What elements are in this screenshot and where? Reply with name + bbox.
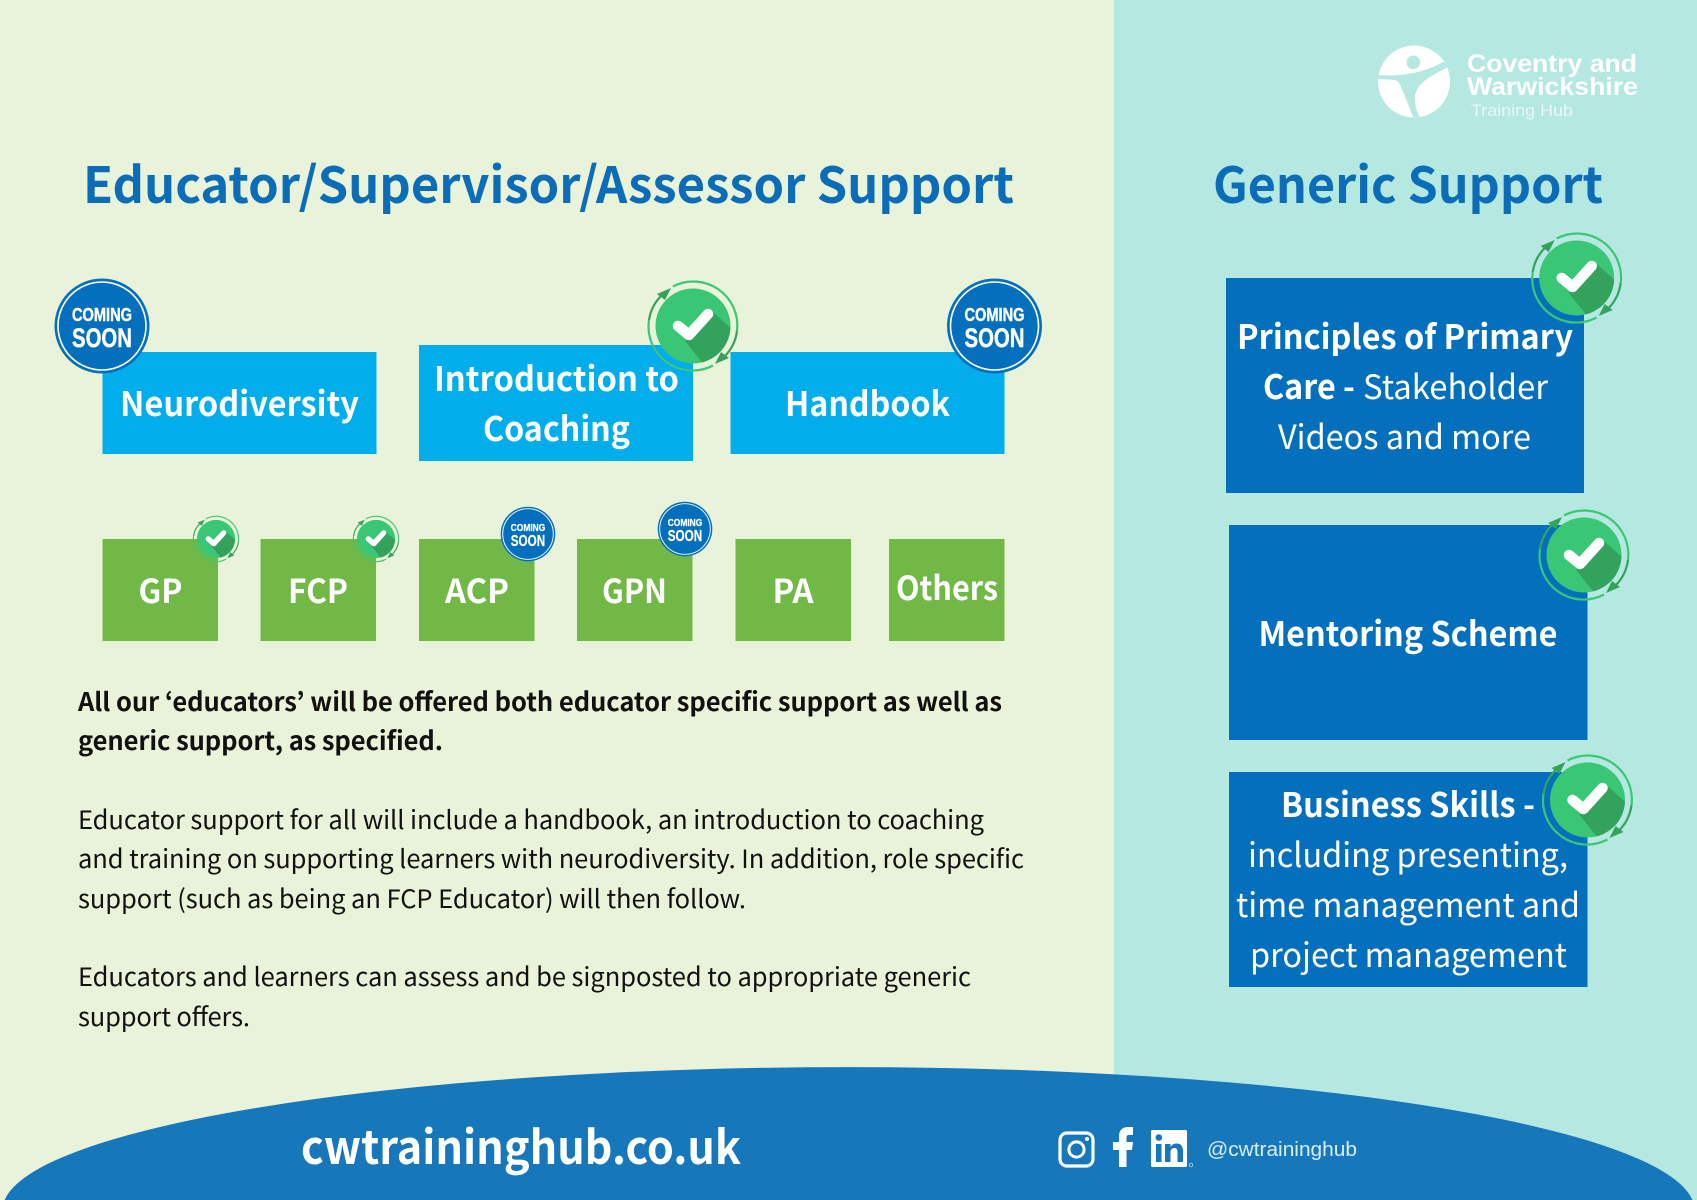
panel: Neurodiversity: Neurodiversity: [120, 377, 359, 426]
footer website: cwtraininghub.co.uk: [301, 1112, 741, 1178]
role box: GPN: GPN: [602, 565, 667, 613]
panel: Principles of Primary Care: Care -: [1263, 360, 1355, 409]
panel: Business Skills: time management and: [1236, 878, 1580, 927]
badge: coming soon Neurodiversity: [54, 278, 150, 374]
badge: tick Introduction to Coaching: [649, 282, 737, 371]
badge: coming soon ACP: [501, 507, 555, 561]
badge: tick GP: [193, 516, 239, 562]
panel: Business Skills: project management: [1250, 928, 1567, 977]
panel: Mentoring Scheme: Mentoring Scheme: [1258, 607, 1558, 656]
role box: Others: [889, 539, 1004, 641]
badge: coming soon Handbook: COMING: [964, 305, 1024, 325]
role box: Others: Others: [896, 562, 998, 610]
icon: facebook: [1113, 1127, 1133, 1167]
text block: educator support description: Educator support for all will include a handbook, an introduction to coaching: [78, 800, 985, 837]
role box: ACP: ACP: [444, 565, 509, 613]
panel: Introduction to Coaching: [419, 345, 693, 461]
badge: coming soon ACP: COMING: [511, 523, 545, 534]
panel: Business Skills: [1229, 772, 1588, 987]
badge: tick Mentoring Scheme: [1540, 511, 1628, 600]
panel: Principles of Primary Care: Videos and more: [1278, 410, 1531, 459]
badge: coming soon Handbook: [947, 278, 1042, 374]
badge: coming soon Neurodiversity: SOON: [72, 323, 132, 353]
icon: linkedin: [1151, 1130, 1193, 1167]
heading: Generic Support: Generic Support: [1213, 146, 1603, 218]
role box: FCP: [260, 539, 376, 641]
logo: Coventry and Warwickshire Training Hub: Training Hub: [1471, 101, 1573, 120]
role box: PA: PA: [772, 565, 814, 613]
text block: educator support description: support (such as being an FCP Educator) will then follow.: [78, 879, 746, 916]
badge: coming soon ACP: SOON: [511, 533, 545, 550]
text block: signposting note: [78, 957, 971, 1034]
badge: coming soon Handbook: SOON: [964, 323, 1024, 353]
panel: Introduction to Coaching: Coaching: [483, 402, 630, 451]
logo: Coventry and Warwickshire Training Hub: [1378, 46, 1638, 120]
panel: Business Skills: Business Skills -: [1281, 778, 1535, 827]
badge: tick FCP: [353, 516, 399, 562]
role box: PA: [736, 539, 851, 641]
panel: Principles of Primary Care: Stakeholder: [1363, 360, 1549, 409]
footer handle: @cwtraininghub: [1207, 1139, 1357, 1161]
icon: instagram: [1060, 1133, 1093, 1166]
footer band: [5, 1067, 1692, 1200]
role box: ACP: [419, 539, 534, 641]
text block: bold statement: generic support, as specified.: [78, 721, 443, 758]
text block: bold statement: [77, 682, 1002, 758]
badge: coming soon Neurodiversity: COMING: [72, 305, 132, 325]
panel: Business Skills: including presenting,: [1248, 828, 1568, 877]
logo: Coventry and Warwickshire Training Hub: Coventry and: [1467, 50, 1637, 78]
panel: Introduction to Coaching: Introduction to: [434, 352, 679, 401]
heading: Educator/Supervisor/Assessor Support: Educator/Supervisor/Assessor Support: [83, 146, 1014, 218]
panel: Handbook: Handbook: [785, 377, 951, 426]
role box: GP: GP: [138, 565, 182, 613]
badge: coming soon GPN: SOON: [668, 528, 702, 545]
panel: Mentoring Scheme: [1229, 525, 1588, 740]
panel: Principles of Primary Care: Principles of Primary: [1237, 310, 1573, 359]
badge: coming soon GPN: COMING: [668, 518, 702, 529]
panel: left background: [0, 0, 1114, 1200]
logo: Coventry and Warwickshire Training Hub: Warwickshire: [1467, 73, 1638, 101]
text block: educator support description: and training on supporting learners with neurodiversity. In addition, role specific: [78, 839, 1024, 876]
text block: signposting note: support offers.: [78, 997, 250, 1034]
text block: educator support description: [78, 800, 1024, 916]
badge: tick Principles of Primary Care: [1532, 234, 1621, 323]
badge: coming soon GPN: [658, 502, 712, 556]
text block: bold statement: All our ‘educators’ will be offered both educator specific support as well as: [77, 682, 1002, 719]
text block: signposting note: Educators and learners can assess and be signposted to appropriate generic: [78, 957, 971, 994]
role box: FCP: FCP: [288, 565, 348, 613]
role box: GPN: [577, 539, 692, 641]
panel: Neurodiversity: [102, 352, 376, 454]
badge: tick Business Skills: [1543, 756, 1632, 845]
panel: Principles of Primary Care: [1226, 278, 1584, 493]
panel: Handbook: [730, 352, 1004, 454]
panel: right background: [1114, 0, 1697, 1200]
role box: GP: [102, 539, 218, 641]
